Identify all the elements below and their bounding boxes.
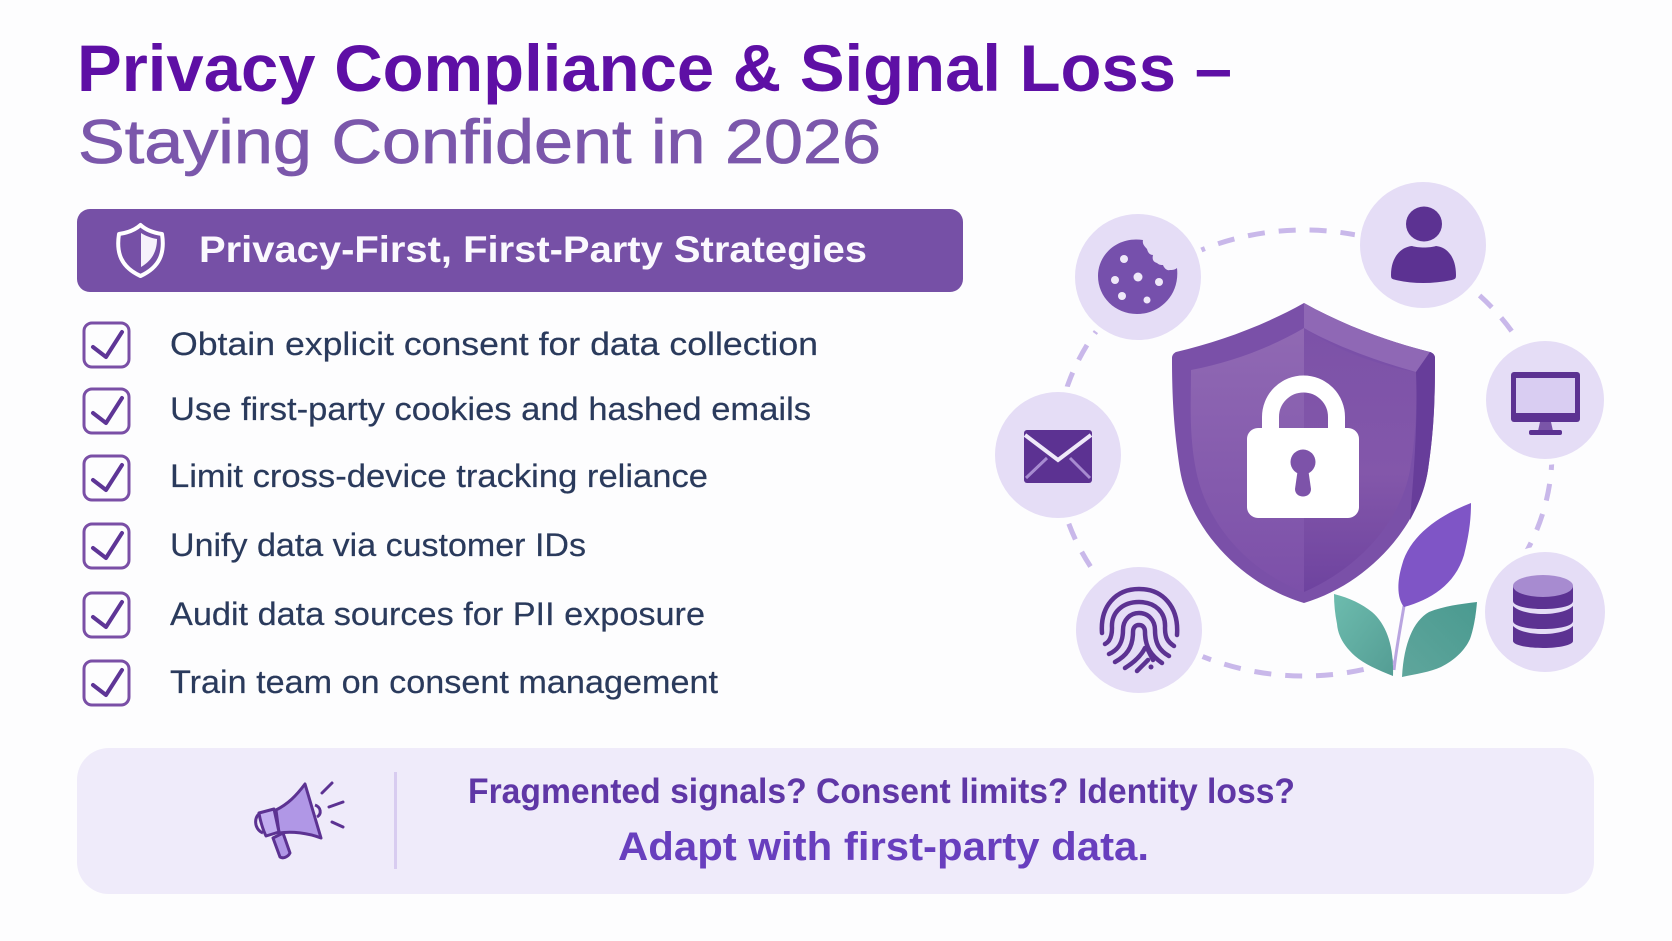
icon: monitor bbox=[1483, 338, 1607, 462]
icon: small shield bbox=[118, 225, 163, 276]
illustration: shield and privacy icons ring bbox=[992, 179, 1608, 696]
callout text: Adapt with first-party data. bbox=[618, 825, 1149, 869]
checklist bbox=[84, 323, 818, 705]
item: explicit consent bbox=[84, 323, 818, 367]
callout text bbox=[468, 772, 1295, 869]
item: first-party cookies bbox=[84, 389, 811, 433]
dashed ring bbox=[1056, 230, 1552, 676]
item: train team: Train team on consent management bbox=[170, 664, 718, 700]
item: audit data sources bbox=[84, 593, 705, 637]
icon: megaphone bbox=[256, 783, 343, 858]
item: cross-device tracking: Limit cross-device tracking reliance bbox=[170, 458, 708, 494]
title: Privacy Compliance & Signal Loss – bbox=[77, 31, 1232, 105]
title: Staying Confident in 2026 bbox=[78, 108, 881, 177]
icon: cookie bbox=[1072, 211, 1204, 343]
icon: central shield bbox=[1172, 303, 1435, 603]
icon: envelope bbox=[992, 389, 1124, 521]
panel: call to action bbox=[77, 748, 1594, 894]
icon: padlock bbox=[1247, 384, 1359, 518]
item: train team bbox=[84, 661, 718, 705]
item: audit data sources: Audit data sources for PII exposure bbox=[170, 596, 705, 632]
item: cross-device tracking bbox=[84, 456, 708, 500]
item: customer IDs: Unify data via customer IDs bbox=[170, 527, 586, 563]
icon: person bbox=[1357, 179, 1489, 311]
item: first-party cookies: Use first-party cookies and hashed emails bbox=[170, 391, 811, 427]
title bbox=[77, 31, 1232, 177]
icon: fingerprint bbox=[1073, 564, 1205, 696]
icon: plant leaves bbox=[1334, 503, 1477, 677]
item: customer IDs bbox=[84, 524, 586, 568]
panel: strategies heading bar bbox=[77, 209, 963, 292]
callout text: Fragmented signals? Consent limits? Identity loss? bbox=[468, 772, 1295, 811]
icon: database bbox=[1482, 549, 1608, 675]
item: explicit consent: Obtain explicit consent for data collection bbox=[170, 326, 818, 362]
panel: strategies heading bar: Privacy-First, First-Party Strategies bbox=[199, 229, 867, 270]
